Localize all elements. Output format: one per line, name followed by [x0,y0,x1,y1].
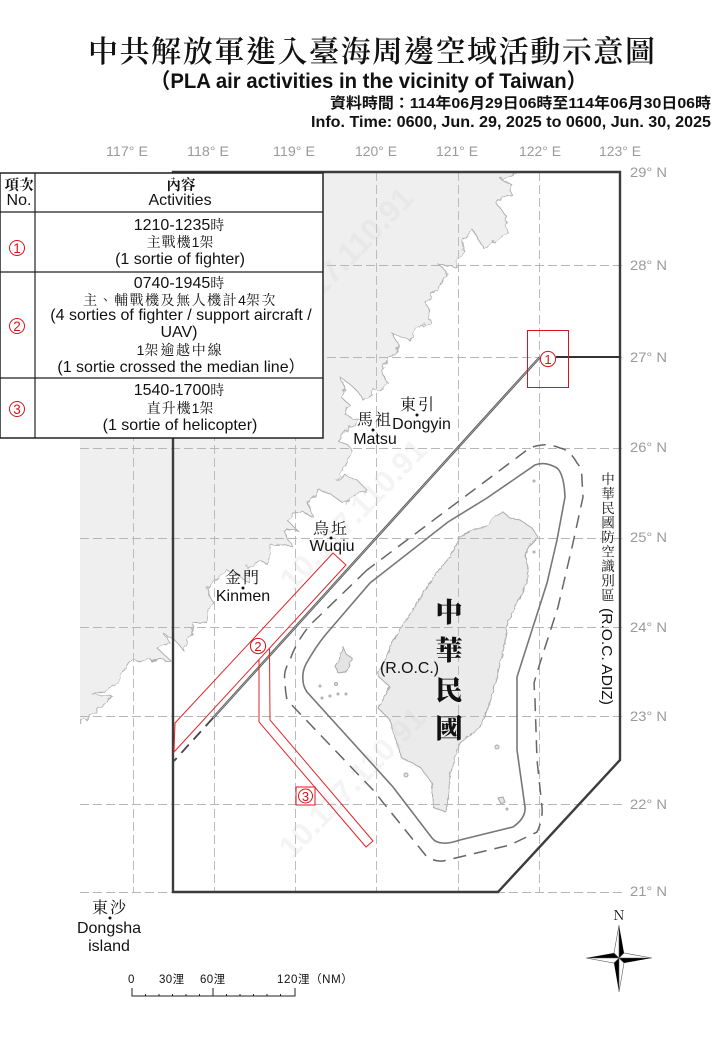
table row 1: 主戰機1架 [147,232,213,252]
table row 2: UAV) [160,324,198,341]
activity zone 2: 2 [254,639,262,654]
label: ROC ADIZ: 區 [601,584,615,604]
label: ROC ADIZ: 華 [601,482,615,502]
information time: Chinese: 資料時間：114年06月29日06時至114年06月30日06時 [330,94,711,112]
title: 中共解放軍進入臺海周邊空域活動示意圖 [88,27,655,71]
place label: Kinmen: Kinmen [216,588,270,605]
label: ROC ADIZ: 空 [601,540,615,560]
table row 2 [10,273,312,376]
latitude labels: 22° N [630,796,667,812]
land: Penghu and outlying islets [319,480,535,810]
icon: north compass: N [613,905,625,925]
label: ROC ADIZ: (R.O.C. ADIZ) [598,608,615,705]
table header: 項次 [4,174,34,195]
scale bar [128,973,353,996]
scale bar: 60浬 [200,973,226,986]
place label: Dongsha island: island [88,938,130,955]
activity zone 1: 1 [544,352,552,367]
place label: Wuqiu [309,516,355,555]
table header: No. [7,192,31,209]
place label: Wuqiu: Wuqiu [309,538,355,555]
activities table [0,173,323,438]
longitude labels: 117° E [106,143,148,159]
table row 1: (1 sortie of fighter) [115,251,245,268]
table row 3: 1540-1700時 [134,380,224,400]
watermarks [260,180,433,865]
latitude labels: 25° N [630,529,667,545]
table row 2: (4 sorties of fighter / support aircraft / [50,307,312,324]
subtitle: （PLA air activities in the vicinity of Taiwan） [150,70,587,93]
table row 2: 2 [13,319,21,334]
table row 3: 直升機1架 [147,398,213,418]
table row 1: 1 [13,241,21,256]
place label: Wuqiu: 烏坵 [313,516,349,539]
label: ROC ADIZ: 民 [601,497,615,517]
place label: Matsu: 馬祖 [357,407,393,430]
land: Taiwan main island [377,512,538,812]
scale bar: 0 [128,974,134,986]
place label: Kinmen [216,565,270,605]
place label: Dongsha island [77,895,141,955]
longitude labels: 118° E [187,143,229,159]
table row 3: 3 [13,402,21,417]
latitude labels: 23° N [630,708,667,724]
latitude labels: 29° N [630,164,667,180]
place label: Dongyin: 東引 [400,392,436,415]
table header [4,174,212,209]
table row 1: 1210-1235時 [134,215,224,235]
watermarks: 10.117.110.91 [273,432,433,597]
map: land masses [50,150,538,812]
inner solid line [303,464,565,843]
longitude labels: 121° E [436,143,478,159]
activity zone 3 [259,648,373,847]
latitude labels: 24° N [630,619,667,635]
longitude labels: 123° E [599,143,641,159]
place label: Matsu [353,407,397,448]
latitude labels: 28° N [630,257,667,273]
scale bar: 120浬（NM） [277,973,353,986]
table header: Activities [148,192,212,209]
latitude labels [630,164,667,899]
label: ROC ADIZ: 中 [601,468,615,488]
ROC ADIZ boundary [173,172,620,892]
table row 2: 1架逾越中線 [137,340,223,360]
longitude labels: 122° E [519,143,561,159]
activity zone 1 [528,330,568,388]
label: ROC: 中 [436,591,462,630]
icon: north compass [586,905,652,992]
longitude labels: 119° E [273,143,315,159]
activity zone 3: 3 [302,789,309,804]
place label: Kinmen: 金門 [225,565,261,588]
label: ROC ADIZ: 國 [601,512,615,532]
label: ROC ADIZ [598,468,615,705]
latitude labels: 27° N [630,349,667,365]
median line [174,357,620,761]
place label: Dongyin [392,392,451,433]
table row 2: (1 sortie crossed the median line） [57,358,305,376]
land: mainland coast [80,173,518,724]
longitude labels [106,143,641,159]
place label: Dongsha island: Dongsha [77,920,141,937]
label: ROC ADIZ: 別 [601,570,615,590]
place label: Dongsha island: 東沙 [92,895,128,918]
table row 2: 0740-1945時 [134,273,224,293]
label: ROC: 國 [436,707,462,746]
table header: 內容 [166,174,196,195]
table row 3 [10,380,257,434]
label: ROC ADIZ: 識 [601,555,615,575]
longitude labels: 120° E [355,143,397,159]
label: ROC: 民 [436,669,462,708]
latitude labels: 26° N [630,439,667,455]
label: ROC ADIZ: 防 [601,526,615,546]
latitude labels: 21° N [630,883,667,899]
label: ROC: 華 [436,629,462,668]
outer dashed line [285,445,583,861]
place label: Dongyin: Dongyin [392,416,451,433]
scale bar: 30浬 [159,973,185,986]
table row 1 [10,215,245,268]
watermarks: 10.117.110.91 [260,180,420,345]
label: ROC [380,591,462,746]
table row 3: (1 sortie of helicopter) [103,417,257,434]
map: latitude and longitude grid [80,172,625,892]
table row 2: 主、輔戰機及無人機計4架次 [83,290,277,310]
label: ROC: (R.O.C.) [380,660,439,677]
watermarks: 10.117.110.91 [272,700,432,865]
place label: Matsu: Matsu [353,431,397,448]
activity zone 2 [174,553,346,752]
information time: English: Info. Time: 0600, Jun. 29, 2025 to 0600, Jun. 30, 2025 [311,114,711,131]
